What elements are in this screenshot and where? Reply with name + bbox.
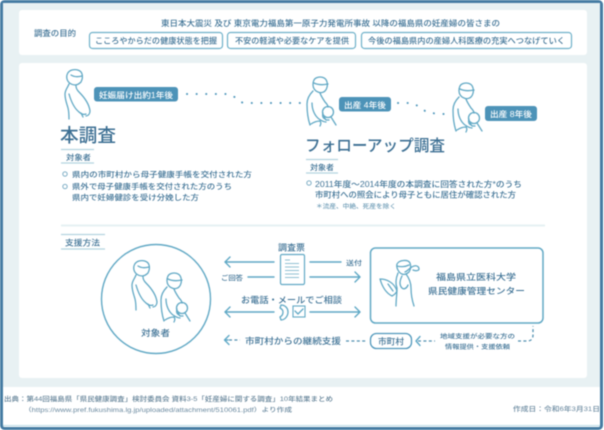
- icon: mail: [293, 306, 305, 317]
- badge: one year after delivery: 妊娠届け出約1年後: [99, 90, 173, 100]
- arrow: dashed to participants: [224, 336, 240, 344]
- text: follow-up target details: [307, 179, 522, 210]
- icon: pregnant woman: [132, 261, 157, 310]
- heading: phone and email consultation: お電話・メールでご相談: [241, 294, 342, 305]
- dashed connector from center: [518, 326, 533, 341]
- icon: mother and baby, four years: [307, 77, 336, 126]
- badge: eight years after delivery: [485, 106, 537, 121]
- label: support method: 支援方法: [65, 238, 100, 248]
- icon: mother and baby: [161, 273, 190, 322]
- text: main survey target details: 県外で母子健康手帳を交付された方のうち: [72, 181, 232, 191]
- icon: nurse with clipboard: [380, 260, 419, 306]
- text: information provision request: 地域支援が必要な方の: [440, 332, 515, 340]
- icon: pregnant woman: [65, 70, 90, 119]
- text: continued municipal support: 市町村からの継続支援: [245, 336, 342, 346]
- purpose pill 3: [362, 32, 572, 48]
- arrow: consultation to participants: [225, 307, 274, 317]
- text: follow-up target details: 市町村への照会により母子ともに居住が確認された方: [315, 190, 516, 200]
- icon: phone: [280, 305, 288, 320]
- source citation: [4, 394, 333, 414]
- label: support method: [61, 234, 105, 249]
- label: sent: 送付: [346, 258, 363, 267]
- label: reply: ご回答: [221, 273, 244, 282]
- panel: survey purpose: [19, 10, 587, 55]
- participants label: 対象者: [141, 328, 171, 338]
- purpose pill 2: [228, 32, 356, 48]
- badge: four years after delivery: 出産 4年後: [344, 100, 386, 110]
- arrow: reply to center: [310, 272, 360, 282]
- dotted timeline to eight years: [398, 103, 445, 114]
- icon: questionnaire document: [280, 254, 304, 284]
- badge: one year after delivery: [94, 87, 178, 102]
- purpose pill 3: 今後の福島県内の産婦人科医療の充実へつなげていく: [368, 36, 565, 46]
- text: follow-up target details: 2011年度～2014年度の本調査に回答された方*のうち: [315, 179, 522, 189]
- arrow: reply to participants: [225, 257, 274, 267]
- source citation: （https://www.pref.fukushima.lg.jp/uploaded/attachment/510061.pdf）より作成: [24, 406, 292, 414]
- participants circle: [102, 244, 210, 354]
- panel: survey details: [19, 63, 587, 378]
- text: main survey target details: 県内の市町村から母子健康手帳を交付された方: [72, 169, 253, 179]
- label: main survey target: 対象者: [66, 152, 92, 162]
- purpose pill 2: 不安の軽減や必要なケアを提供: [235, 36, 349, 46]
- text: main survey target details: 県内で妊婦健診を受け分娩した方: [72, 192, 200, 202]
- text: follow-up target details: ＊流産、中絶、死産を除く: [316, 202, 396, 210]
- badge: municipality: 市町村: [378, 336, 404, 346]
- label: follow-up target: 対象者: [310, 162, 335, 172]
- arrow: dashed to municipality: [416, 336, 435, 346]
- heading: survey purpose: 調査の目的: [34, 28, 76, 38]
- text: main survey target details: [63, 169, 253, 202]
- badge: four years after delivery: [339, 97, 391, 112]
- arrow: consultation to center: [310, 307, 360, 317]
- label: main survey target: [61, 150, 94, 163]
- icon: mother and baby, eight years: [453, 83, 482, 132]
- purpose pill 1: こころやからだの健康状態を把握: [95, 36, 217, 46]
- source citation: 出典：第44回福島県「県民健康調査」検討委員会 資料3-5「妊産婦に関する調査」10年結果まとめ: [4, 394, 333, 403]
- heading: main survey: 本調査: [60, 125, 116, 146]
- badge: eight years after delivery: 出産 8年後: [490, 109, 532, 119]
- panel: health management center: 県民健康管理センター: [428, 286, 525, 296]
- purpose statement: 東日本大震災 及び 東京電力福島第一原子力発電所事故 以降の福島県の妊産婦の皆さまの: [161, 18, 500, 28]
- text: information provision request: [440, 332, 515, 351]
- creation date: 作成日：令和6年3月31日: [513, 404, 600, 413]
- heading: questionnaire: 調査票: [278, 242, 306, 252]
- purpose pill 1: [90, 32, 222, 48]
- badge: municipality: [370, 334, 412, 348]
- heading: follow-up survey: フォローアップ調査: [305, 137, 445, 155]
- center name: 福島県立医科大学: [436, 272, 517, 282]
- label: follow-up target: [306, 160, 338, 173]
- dotted timeline to follow-up: [187, 94, 300, 103]
- panel: health management center: [370, 248, 543, 323]
- text: information provision request: 情報提供・支援依頼: [445, 343, 511, 351]
